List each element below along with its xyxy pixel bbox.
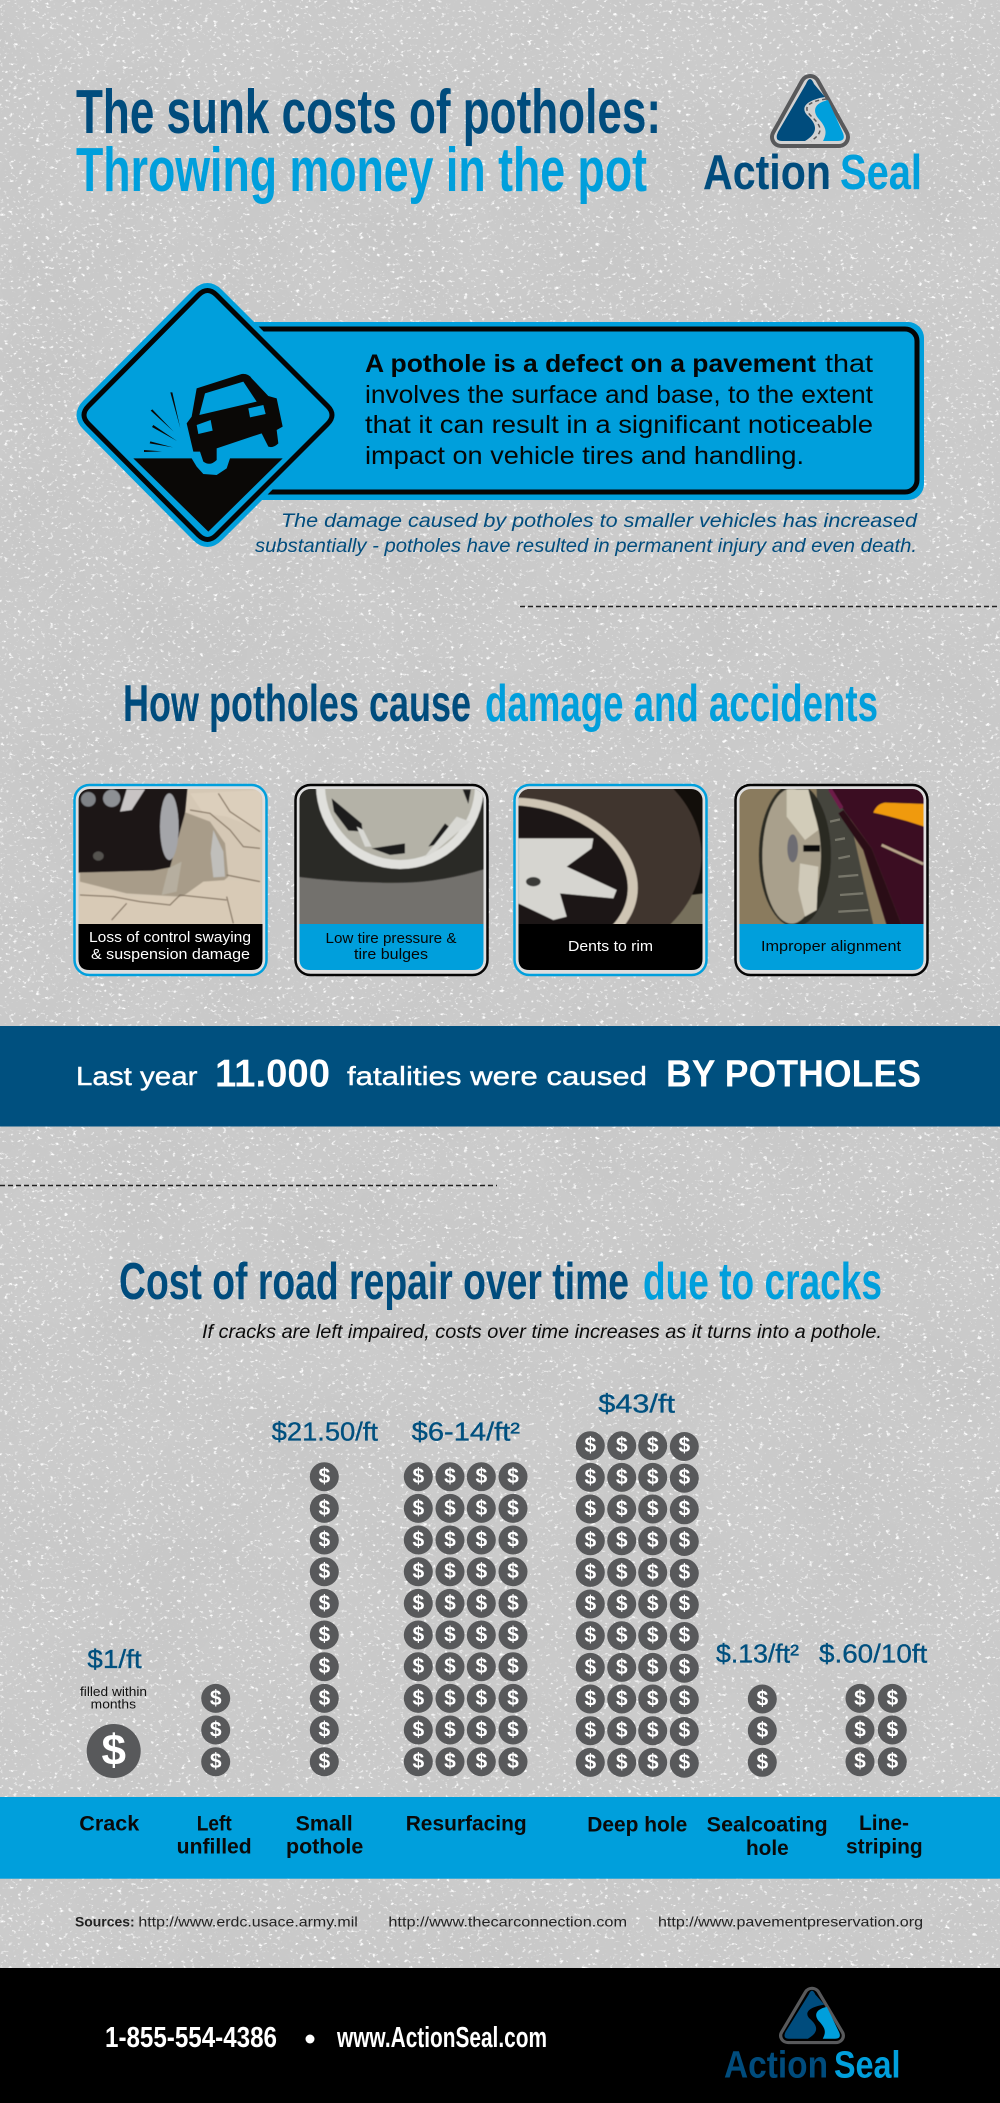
- column: Deep hole: $$$$: [584, 1624, 690, 1647]
- column: Resurfacing: $$$$: [412, 1528, 519, 1552]
- column: Line-striping: $.60/10ft: [819, 1638, 928, 1668]
- sources: Sources:: [75, 1914, 135, 1930]
- panel: damage photo cards: [73, 784, 929, 976]
- chart category band: Line-: [859, 1812, 909, 1835]
- heading: cost of road repair: due to cracks: [643, 1253, 882, 1311]
- column: Sealcoating hole: [716, 1638, 799, 1777]
- title: Throwing money in the pot: [76, 136, 647, 205]
- definition text: that: [825, 350, 873, 378]
- caption: Dents to rim: [568, 938, 653, 955]
- footer: [0, 1968, 1000, 2103]
- subheading: If cracks are left impaired, costs over time increases as it turns into a pothole.: [202, 1322, 882, 1343]
- column: Small pothole: $21.50/ft: [272, 1417, 379, 1447]
- footer logo: Action: [724, 2045, 828, 2087]
- column: Deep hole: $$$$: [584, 1466, 690, 1489]
- column: Deep hole: $$$$: [584, 1751, 690, 1774]
- column: Crack: months: [91, 1697, 137, 1712]
- caption: & suspension damage: [91, 946, 250, 963]
- column: Resurfacing: $$$$: [412, 1750, 519, 1773]
- icon: pothole warning sign: [84, 290, 332, 540]
- chart: repair cost coin columns: [80, 1388, 928, 1778]
- caption: Loss of control swaying: [89, 929, 251, 946]
- chart category band: Crack: [79, 1813, 140, 1836]
- caption: [740, 924, 924, 970]
- fatalities banner: BY POTHOLES: [666, 1054, 921, 1096]
- definition text: impact on vehicle tires and handling.: [365, 442, 804, 470]
- photo: dented rim: [518, 789, 702, 962]
- chart category band: Deep hole: [587, 1813, 687, 1836]
- column: Deep hole: $$$$: [584, 1498, 690, 1520]
- column: Small pothole: [272, 1417, 379, 1776]
- photo: flat tire: [300, 789, 484, 924]
- column: Deep hole: $$$$: [584, 1529, 690, 1552]
- italic note: substantially - potholes have resulted in permanent injury and even death.: [255, 536, 917, 557]
- caption: [518, 924, 702, 970]
- definition text: [365, 350, 873, 470]
- photo: misaligned wheel: [737, 783, 927, 927]
- fatalities banner: Last year: [76, 1061, 198, 1091]
- column: Small pothole: $$$$$$$$$$: [318, 1465, 330, 1773]
- column: Deep hole: $$$$: [584, 1688, 690, 1710]
- caption: Improper alignment: [761, 938, 902, 955]
- column: Left unfilled: [201, 1684, 230, 1776]
- column: Sealcoating hole: $$$: [756, 1688, 768, 1774]
- chart category band: Small: [296, 1813, 353, 1836]
- column: Crack: $: [101, 1726, 126, 1775]
- column: Resurfacing: $$$$: [412, 1560, 519, 1583]
- italic note: [255, 511, 919, 557]
- panel: pothole definition: [84, 290, 924, 557]
- column: Deep hole: $$$$: [584, 1592, 690, 1616]
- column: Resurfacing: $$$$: [412, 1624, 519, 1646]
- sources: http://www.erdc.usace.army.mil: [138, 1914, 358, 1930]
- column: Resurfacing: $$$$: [412, 1465, 519, 1488]
- chart category band: unfilled: [177, 1836, 252, 1859]
- chart category band: Left: [197, 1813, 232, 1836]
- card: improper alignment: [736, 783, 928, 975]
- logo mark: [777, 79, 844, 141]
- column: Deep hole: $$$$: [584, 1561, 690, 1584]
- column: Deep hole: [576, 1388, 699, 1778]
- card: low tire pressure: [294, 784, 489, 976]
- caption: [300, 924, 484, 970]
- footer logo: Seal: [834, 2045, 900, 2087]
- column: Resurfacing: $$$$: [412, 1592, 519, 1615]
- logo: Action Seal: Action: [703, 146, 831, 200]
- column: Crack: filled within: [80, 1684, 147, 1699]
- column: Deep hole: $$$$: [584, 1656, 690, 1679]
- column: Sealcoating hole: $.13/ft²: [716, 1638, 799, 1668]
- title: The sunk costs of potholes:: [76, 78, 661, 147]
- caption: [78, 924, 262, 970]
- column: Deep hole: $$$$: [584, 1434, 690, 1457]
- contact details: www.ActionSeal.com: [336, 2022, 547, 2054]
- heading: cost of road repair: Cost of road repair over time: [119, 1253, 629, 1311]
- chart category band: pothole: [286, 1836, 363, 1859]
- chart category band: hole: [746, 1837, 789, 1860]
- definition text: A pothole is a defect on a pavement: [365, 350, 817, 378]
- contact details: 1-855-554-4386: [105, 2022, 277, 2054]
- column: Crack: $1/ft: [87, 1644, 143, 1674]
- column: Resurfacing: $$$$: [412, 1497, 519, 1520]
- italic note: The damage caused by potholes to smaller vehicles has increased: [281, 511, 919, 532]
- definition banner: [200, 322, 924, 500]
- chart category band: striping: [846, 1836, 923, 1859]
- column: Resurfacing: $$$$: [412, 1655, 519, 1678]
- fatalities banner: fatalities were caused: [347, 1061, 647, 1091]
- photo: car in pothole: [78, 788, 262, 925]
- column: Deep hole: $43/ft: [598, 1388, 676, 1418]
- column: Crack: [80, 1644, 147, 1778]
- sources: http://www.thecarconnection.com: [388, 1914, 627, 1930]
- caption: Low tire pressure &: [326, 930, 456, 947]
- column: Resurfacing: $$$$: [412, 1687, 519, 1710]
- column: Resurfacing: [404, 1417, 528, 1776]
- heading: how potholes cause damage: How potholes cause: [123, 675, 471, 733]
- heading: how potholes cause damage: [123, 675, 878, 733]
- footer logo: [724, 1991, 900, 2087]
- column: Resurfacing: $6-14/ft²: [412, 1417, 520, 1447]
- contact details: [105, 2022, 547, 2054]
- definition text: that it can result in a significant noticeable: [365, 411, 873, 439]
- definition text: involves the surface and base, to the extent: [365, 381, 873, 409]
- logo: Action Seal: [703, 79, 922, 200]
- column: Line-striping: [819, 1638, 928, 1776]
- chart category band: Sealcoating: [707, 1813, 828, 1836]
- fatalities banner: [0, 1026, 1000, 1126]
- column: Resurfacing: $$$$: [412, 1718, 519, 1742]
- column: Left unfilled: $$$: [210, 1687, 222, 1773]
- column: Line-striping: $$$$$$: [854, 1687, 898, 1773]
- logo: Action Seal: Seal: [840, 146, 922, 200]
- title: [76, 78, 661, 205]
- fatalities banner: 11.000: [215, 1053, 330, 1096]
- chart category band: Resurfacing: [406, 1813, 527, 1836]
- card: loss of control: [74, 785, 266, 975]
- caption: tire bulges: [354, 946, 428, 963]
- card: dents to rim: [513, 784, 708, 976]
- sources: [75, 1914, 923, 1930]
- chart category band: [0, 1797, 1000, 1879]
- sources: http://www.pavementpreservation.org: [658, 1914, 923, 1930]
- column: Deep hole: $$$$: [584, 1719, 690, 1742]
